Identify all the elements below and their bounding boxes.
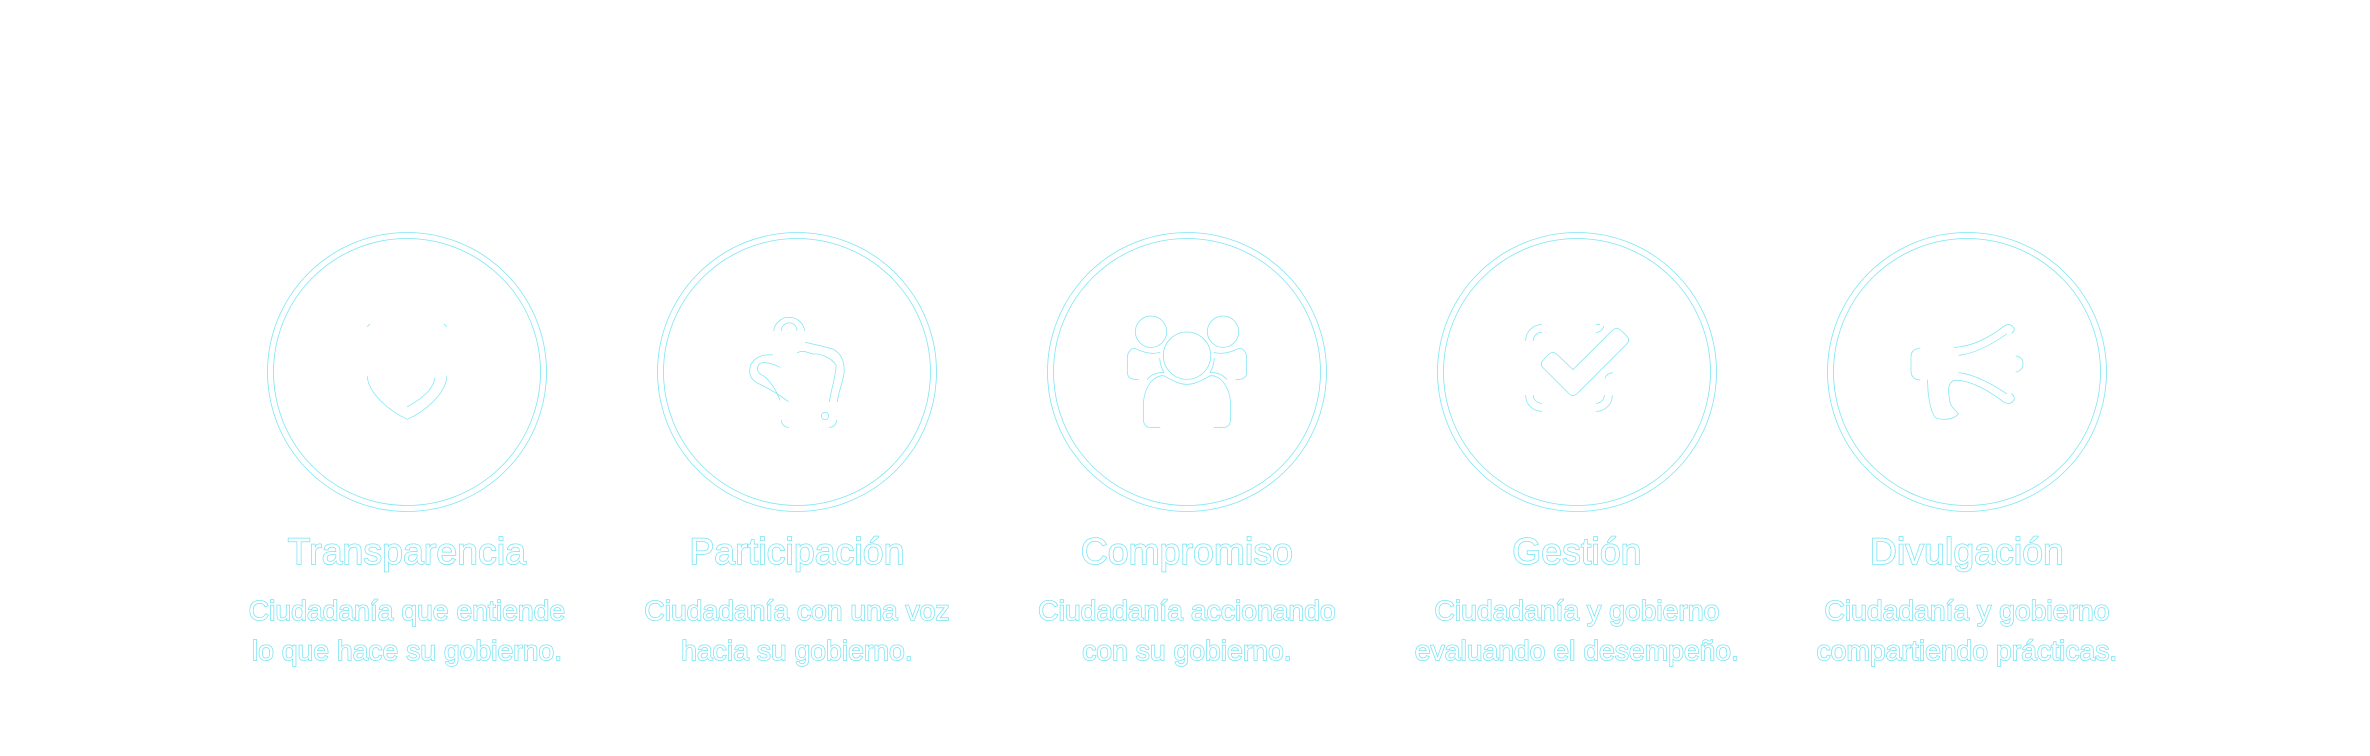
text block: Gestión description: Ciudadanía y gobierno [1435, 595, 1719, 626]
icon: group of people [1127, 316, 1247, 428]
text block: Transparencia description: lo que hace su gobierno. [252, 635, 562, 666]
text block: Compromiso description: con su gobierno. [1082, 635, 1292, 666]
text block: Gestión description [1415, 595, 1739, 666]
text block: Participación description [644, 595, 950, 666]
text block: Divulgación description [1817, 595, 2117, 666]
icon: check mark in frame [1526, 324, 1629, 411]
text block: Divulgación description: Ciudadanía y gobierno [1825, 595, 2109, 626]
text block: Participación description: Ciudadanía con una voz [644, 595, 950, 626]
text block: Compromiso description [1038, 595, 1336, 666]
icon: double ring [268, 232, 546, 512]
icon: megaphone [1911, 325, 2023, 419]
panel: Gestión [1415, 232, 1739, 666]
text block: Divulgación description: compartiendo prácticas. [1817, 635, 2117, 666]
heading: Divulgación: Divulgación [1870, 531, 2064, 572]
text block: Transparencia description: Ciudadanía que entiende [249, 595, 565, 626]
icon: double ring [1438, 232, 1716, 512]
icon: shield [367, 324, 447, 419]
panel: Divulgación [1817, 232, 2117, 666]
heading: Participación: Participación [689, 531, 905, 572]
icon: raised hand [750, 317, 844, 427]
heading: Gestión: Gestión [1512, 531, 1642, 572]
heading: Transparencia: Transparencia [288, 531, 526, 572]
icon: double ring [1828, 232, 2106, 512]
text block: Participación description: hacia su gobierno. [681, 635, 913, 666]
icon: double ring [658, 232, 936, 512]
icon: double ring [1048, 232, 1326, 512]
text block: Gestión description: evaluando el desempeño. [1415, 635, 1739, 666]
panel: Participación [644, 232, 950, 666]
panel: Compromiso [1038, 232, 1336, 666]
panel: Transparencia [249, 232, 565, 666]
text block: Compromiso description: Ciudadanía accionando [1038, 595, 1336, 626]
heading: Compromiso: Compromiso [1081, 531, 1293, 572]
text block: Transparencia description [249, 595, 565, 666]
